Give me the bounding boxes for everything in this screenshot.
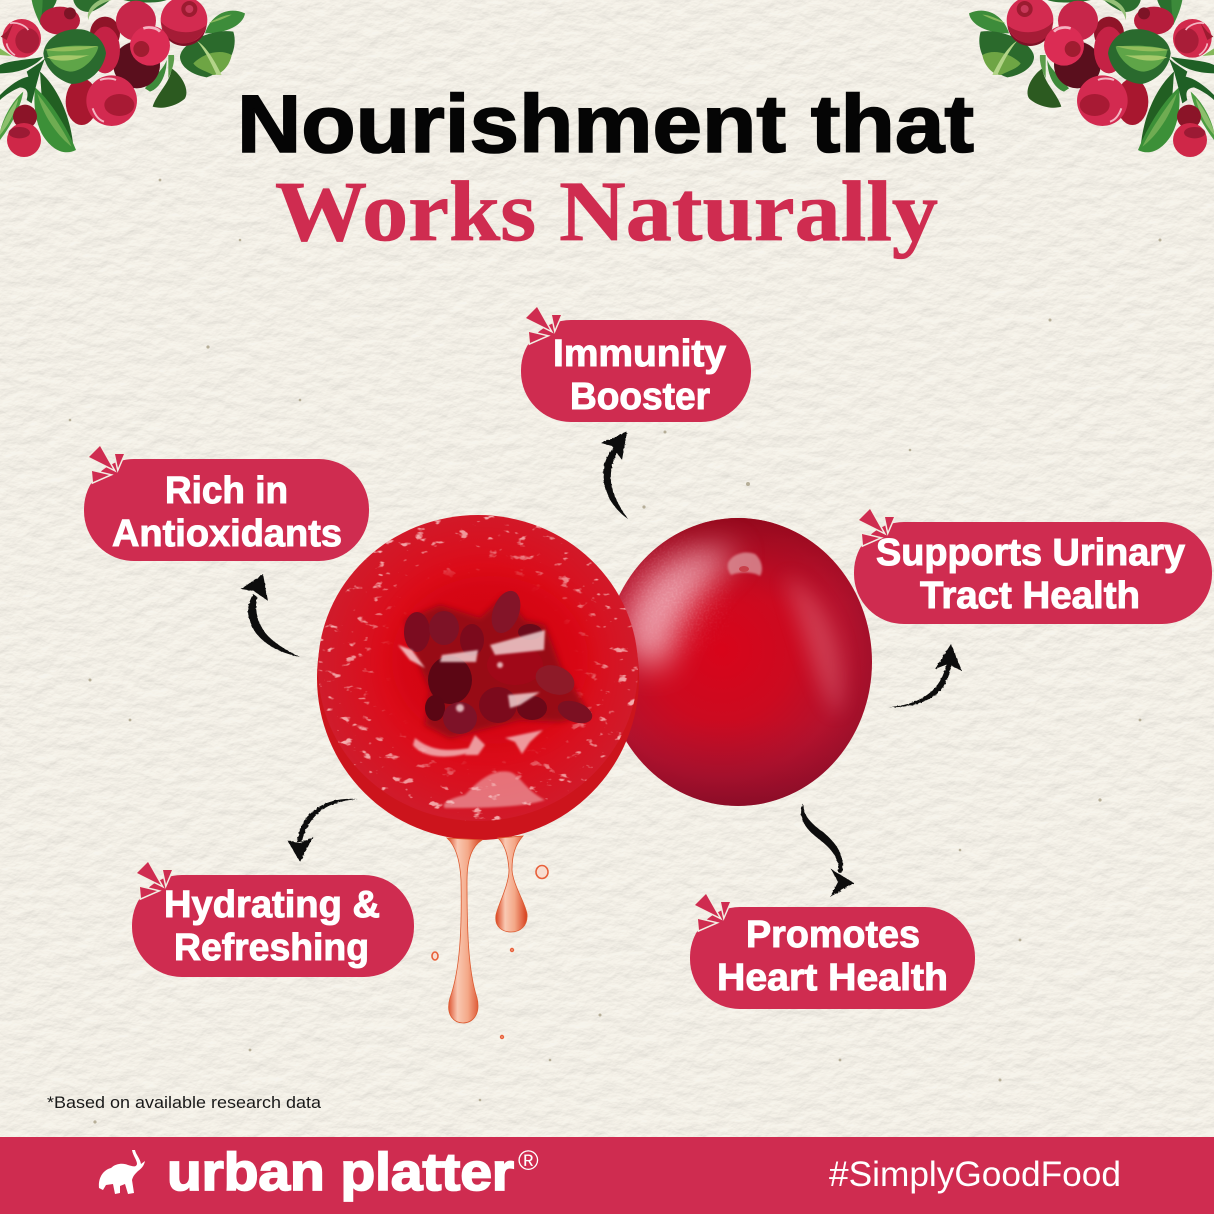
whole cranberry xyxy=(619,518,872,806)
corner foliage: right xyxy=(969,0,1214,157)
long drip xyxy=(447,838,482,1023)
arrow: to hydrating xyxy=(287,799,358,862)
arrow: to urinary tract health xyxy=(888,644,962,707)
hashtag: #SimplyGoodFood xyxy=(829,1155,1121,1194)
big leaf xyxy=(43,29,106,84)
label: Antioxidants xyxy=(112,513,342,555)
label: Heart Health xyxy=(717,957,948,999)
footnote: *Based on available research data xyxy=(47,1094,322,1112)
sheen xyxy=(619,528,849,710)
droplets xyxy=(432,866,548,1038)
label: Supports Urinary xyxy=(876,532,1185,574)
label xyxy=(112,470,342,555)
leaves behind berries xyxy=(0,0,245,152)
arrow: to rich in antioxidants xyxy=(241,574,300,657)
label: Hydrating & xyxy=(164,884,380,926)
brand name: urban platter xyxy=(167,1143,514,1202)
seed cavity xyxy=(398,587,595,738)
label: Immunity xyxy=(553,333,726,375)
spark icon xyxy=(137,862,172,898)
title line 2: Works Naturally xyxy=(275,163,938,259)
paper speckles xyxy=(69,179,1162,1124)
label: Rich in xyxy=(165,470,288,512)
flesh specks xyxy=(318,516,640,822)
glaze on seeds xyxy=(398,630,545,712)
label: Refreshing xyxy=(174,927,369,969)
flesh highlights xyxy=(413,730,545,808)
arrow: to heart health xyxy=(801,804,854,897)
title line 1: Nourishment that xyxy=(237,79,974,170)
stem dimple xyxy=(728,552,762,576)
spark icon xyxy=(695,894,730,930)
spark icon xyxy=(89,446,124,482)
inner core shade xyxy=(392,576,588,744)
short drip xyxy=(496,836,527,932)
cut face xyxy=(318,515,638,821)
juice drips xyxy=(432,836,548,1038)
label: Promotes xyxy=(746,914,920,956)
icon: elephant logo xyxy=(99,1150,145,1194)
registered mark: ® xyxy=(518,1145,539,1176)
footer bar xyxy=(0,1137,1214,1214)
corner foliage: left xyxy=(0,0,245,157)
label: Booster xyxy=(570,376,710,418)
spark icon xyxy=(859,509,894,545)
spark icon xyxy=(526,307,561,343)
pill: rich in antioxidants xyxy=(84,446,369,561)
label xyxy=(553,333,726,418)
pill: supports urinary tract health xyxy=(854,509,1212,624)
seeds xyxy=(404,587,595,734)
pill: hydrating and refreshing xyxy=(132,862,414,977)
label xyxy=(717,914,948,999)
berries xyxy=(1,0,207,157)
label xyxy=(876,532,1185,617)
title xyxy=(237,79,974,259)
label: Tract Health xyxy=(920,575,1140,617)
pill: immunity booster xyxy=(521,307,751,422)
arrow: to immunity booster xyxy=(601,432,628,519)
label xyxy=(164,884,380,969)
pill: promotes heart health xyxy=(690,894,975,1009)
cut cranberry half xyxy=(317,515,640,840)
